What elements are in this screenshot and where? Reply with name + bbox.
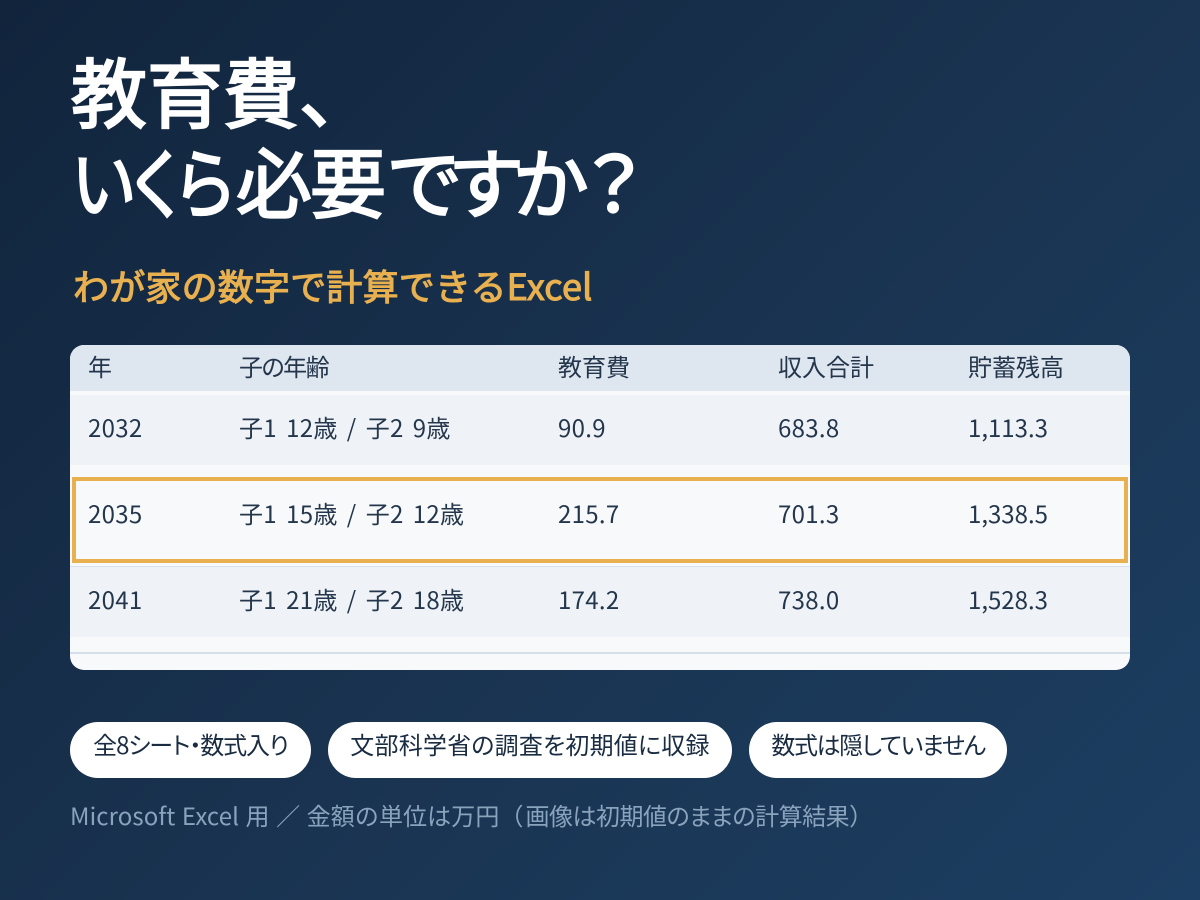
title	[70, 34, 652, 234]
cell: income: 683.8	[778, 409, 839, 444]
cell: savings: 1,338.5	[968, 495, 1048, 530]
row 2032	[70, 395, 1130, 465]
row 2041	[70, 567, 1130, 637]
cell: ages: 子1 21歳 / 子2 18歳	[239, 581, 464, 616]
footnote: Microsoft Excel 用 ／ 金額の単位は万円（画像は初期値のままの計算結果）	[70, 797, 873, 832]
pill: open formulas	[749, 722, 1007, 778]
cell: cost: 215.7	[558, 495, 619, 530]
pill: sheets: 全8シート・数式入り	[93, 726, 288, 761]
cell: ages: 子1 15歳 / 子2 12歳	[239, 495, 464, 530]
panel: table	[70, 345, 1130, 670]
header: child age: 子の年齢	[239, 348, 328, 383]
cell: income: 701.3	[778, 495, 839, 530]
cell: income: 738.0	[778, 581, 839, 616]
subtitle: わが家の数字で計算できるExcel	[73, 259, 593, 311]
cell: cost: 90.9	[558, 409, 606, 444]
title: 必要	[236, 124, 384, 234]
table header row	[70, 345, 1130, 391]
cell: savings: 1,528.3	[968, 581, 1048, 616]
header: education cost: 教育費	[558, 348, 630, 383]
cell: ages: 子1 12歳 / 子2 9歳	[239, 409, 451, 444]
pill: MEXT survey: 文部科学省の調査を初期値に収録	[350, 726, 710, 761]
pill: sheets	[70, 722, 311, 778]
cell: year: 2035	[88, 495, 142, 530]
highlighted row 2035	[72, 477, 1128, 563]
cell: cost: 174.2	[558, 581, 619, 616]
cell: savings: 1,113.3	[968, 409, 1048, 444]
title: ？	[576, 124, 652, 234]
title: いくら	[72, 124, 233, 234]
header: savings balance: 貯蓄残高	[968, 348, 1064, 383]
cell: year: 2032	[88, 409, 142, 444]
title: ですか	[389, 124, 581, 234]
pill: open formulas: 数式は隠していません	[771, 726, 985, 761]
title: 教育費、	[71, 34, 375, 144]
pill: MEXT survey	[328, 722, 732, 778]
cell: year: 2041	[88, 581, 142, 616]
header: year: 年	[88, 348, 112, 383]
header: total income: 収入合計	[778, 348, 874, 383]
